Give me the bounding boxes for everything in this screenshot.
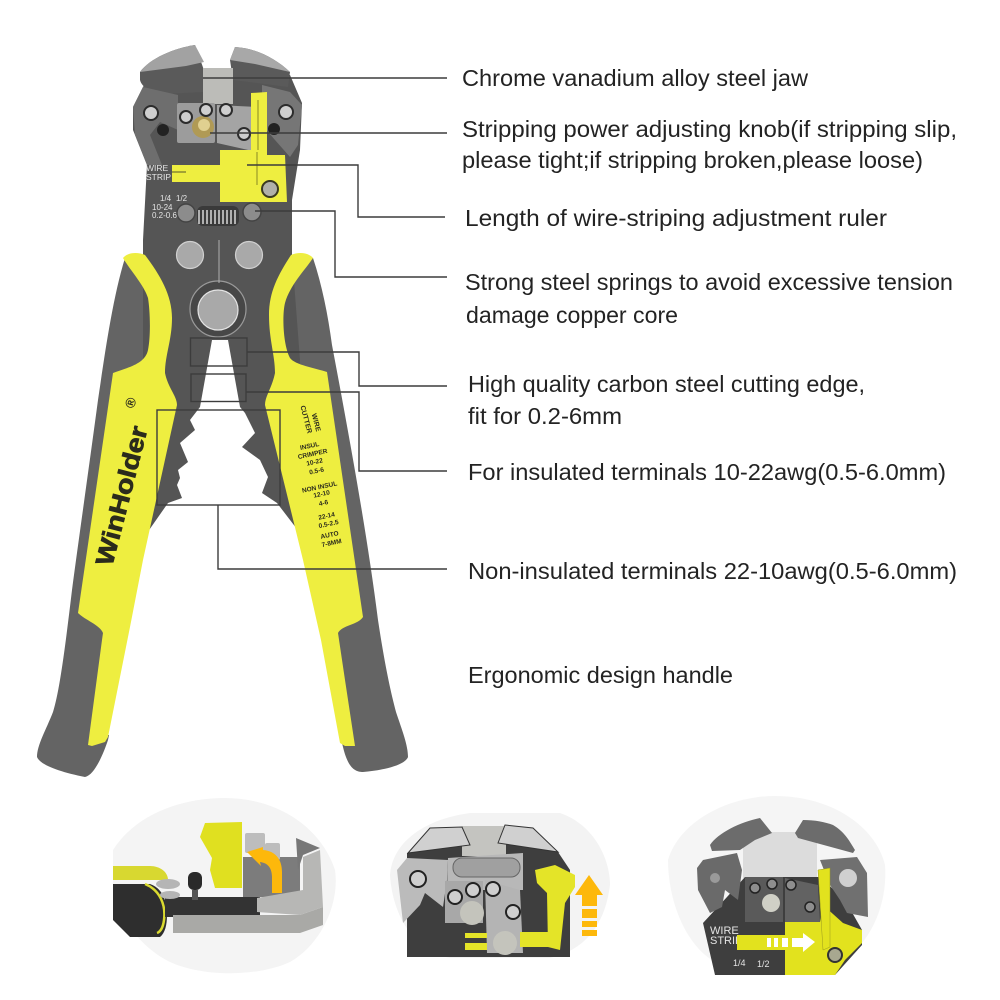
step 1 jaw tip — [296, 838, 320, 870]
step 1 photo: lift slider side view — [113, 798, 336, 973]
step 3 right jaw — [795, 820, 855, 853]
left stripping plate — [177, 103, 215, 143]
jaw opening — [103, 340, 345, 735]
yellow wire-strip slider — [172, 92, 287, 202]
right jaw wedge — [230, 47, 290, 87]
step 3 marks text: WIRE — [710, 925, 739, 937]
screws — [144, 104, 293, 140]
registered mark: ® — [121, 395, 140, 410]
handle spec labels: 0.5-2.5 — [318, 519, 340, 530]
step 3 lever screw — [828, 948, 842, 962]
step 2 tool body — [407, 843, 570, 957]
jaw holes — [157, 123, 280, 136]
left handle grip — [37, 258, 160, 777]
callout: adjusting knob: please tight;if stripping broken,please loose) — [462, 147, 923, 173]
callout: springs — [465, 269, 953, 328]
handle spec labels: CUTTER — [298, 405, 313, 434]
left cheek plate — [133, 87, 178, 165]
step 2 orange up arrow — [575, 875, 603, 936]
handle spec labels: 7-8MM — [321, 538, 342, 549]
wire strip markings: 10-24 — [152, 203, 173, 212]
step 3 right cheek — [820, 857, 868, 917]
wire strip markings: 0.2-0.6 — [152, 211, 177, 220]
wire strip markings: WIRE — [146, 163, 169, 173]
step 1 gray block — [243, 857, 300, 897]
step 3 white right arrow — [767, 933, 815, 952]
brand name on handle: WinHolder — [91, 423, 154, 569]
handle spec labels: 0.5-6 — [309, 466, 325, 476]
handle spec labels: INSUL — [299, 441, 320, 452]
slider slit — [172, 171, 186, 173]
callout: length ruler: Length of wire-striping adjustment ruler — [465, 205, 887, 231]
step 3 tool body — [703, 877, 862, 975]
step 1 dark plate — [165, 897, 260, 917]
step 1 black handle — [113, 884, 167, 937]
right stripping plate — [217, 105, 257, 152]
spring rivets — [177, 203, 261, 222]
step 2 left jaw — [408, 827, 470, 853]
handle spec labels: CRIMPER — [297, 448, 328, 461]
left handle yellow insert — [78, 253, 177, 746]
step 2 slot — [453, 858, 520, 877]
step 1 steel base — [173, 907, 323, 933]
step 1 pin — [188, 872, 202, 900]
step 3 photo: pull slider right — [668, 796, 885, 975]
handle spec labels: WIRE — [310, 413, 321, 433]
callout: ergonomic handle: Ergonomic design handle — [468, 662, 733, 688]
step 2 center plate — [447, 853, 523, 890]
step 3 right plate — [785, 878, 820, 922]
callout leader lines — [157, 78, 447, 569]
step 1 jaw — [257, 850, 323, 915]
callout: cutting edge: High quality carbon steel cutting edge, — [468, 371, 865, 397]
callout: springs: Strong steel springs to avoid excessive tension — [465, 269, 953, 295]
adjusting knob — [192, 116, 214, 138]
handle spec labels — [297, 405, 342, 549]
step 3 left cheek — [697, 853, 742, 913]
lever edge — [257, 100, 258, 185]
step 3 marks text: 1/4 — [733, 958, 746, 968]
step 3 cheek holes — [710, 869, 857, 887]
step 3 knob — [762, 894, 780, 912]
step 1 yellow handle — [113, 866, 168, 880]
callout: adjusting knob — [462, 116, 957, 173]
step 3 left jaw — [710, 818, 772, 851]
step 1 yellow lever — [200, 822, 242, 888]
wire strip markings: 1/4 — [160, 194, 172, 203]
step 2 left cheek — [397, 858, 448, 923]
step 2 photo: push slider up — [390, 813, 610, 958]
callout: adjusting knob: Stripping power adjusting knob(if stripping slip, — [462, 116, 957, 142]
callout: cutting edge: fit for 0.2-6mm — [468, 403, 622, 429]
handle spec labels: AUTO — [320, 530, 339, 541]
spring — [197, 206, 239, 226]
step 1 knobs — [245, 833, 280, 860]
right cheek plate — [262, 85, 302, 157]
wire strip markings — [146, 163, 188, 220]
step 2 yellow lever — [535, 865, 575, 950]
left jaw wedge — [140, 45, 205, 94]
step 3 marks text: STRIP — [710, 935, 742, 947]
step 3 yellow lever — [818, 868, 830, 950]
wire strip markings: STRIP — [146, 172, 171, 182]
step 3 marks text: 1/2 — [757, 959, 770, 969]
callout: springs: damage copper core — [466, 302, 678, 328]
step 3 background — [668, 796, 885, 975]
step 1 steel rivets — [156, 879, 180, 899]
center jaw texture — [203, 68, 233, 104]
handle spec labels: 12-10 — [313, 489, 331, 500]
head centre seam — [218, 240, 220, 283]
callout: non-insulated terminals: Non-insulated terminals 22-10awg(0.5-6.0mm) — [468, 558, 957, 584]
handle spec labels: 22-14 — [318, 511, 336, 522]
step 1 orange curved arrow — [247, 847, 282, 893]
step 2 screws — [410, 871, 520, 919]
step 2 slider plate — [485, 880, 523, 953]
step 1 handle yellow band — [145, 884, 164, 933]
right handle yellow insert — [265, 253, 363, 746]
step 2 right jaw — [498, 825, 558, 852]
handle spec labels: 4-6 — [318, 499, 329, 508]
step 2 knob — [460, 901, 484, 925]
step 2 background — [390, 813, 610, 958]
tool head body — [133, 75, 305, 540]
step 1 background — [113, 798, 336, 973]
step 2 yellow slider arm — [465, 932, 548, 950]
callout: steel jaw: Chrome vanadium alloy steel jaw — [462, 65, 808, 91]
right handle grip — [280, 258, 408, 772]
callout: insulated terminals: For insulated terminals 10-22awg(0.5-6.0mm) — [468, 459, 946, 485]
handle spec labels: NON INSUL — [301, 480, 338, 495]
step 3 metal centre — [743, 832, 817, 878]
step 2 center texture — [462, 826, 506, 856]
step 3 screws — [750, 879, 815, 912]
wire stripper tool — [37, 45, 408, 777]
wire strip markings: 1/2 — [176, 194, 188, 203]
step 2 left plate — [445, 881, 483, 923]
lower rivets — [176, 242, 262, 268]
step 2 slider screw — [493, 931, 517, 955]
callout: cutting edge — [468, 371, 865, 429]
step 3 marks text — [710, 925, 770, 969]
handle spec labels: 10-22 — [306, 457, 324, 468]
main pivot — [190, 281, 246, 337]
step 3 left plate — [745, 877, 783, 922]
slider screw — [262, 181, 278, 197]
step 3 yellow slider — [737, 905, 862, 975]
